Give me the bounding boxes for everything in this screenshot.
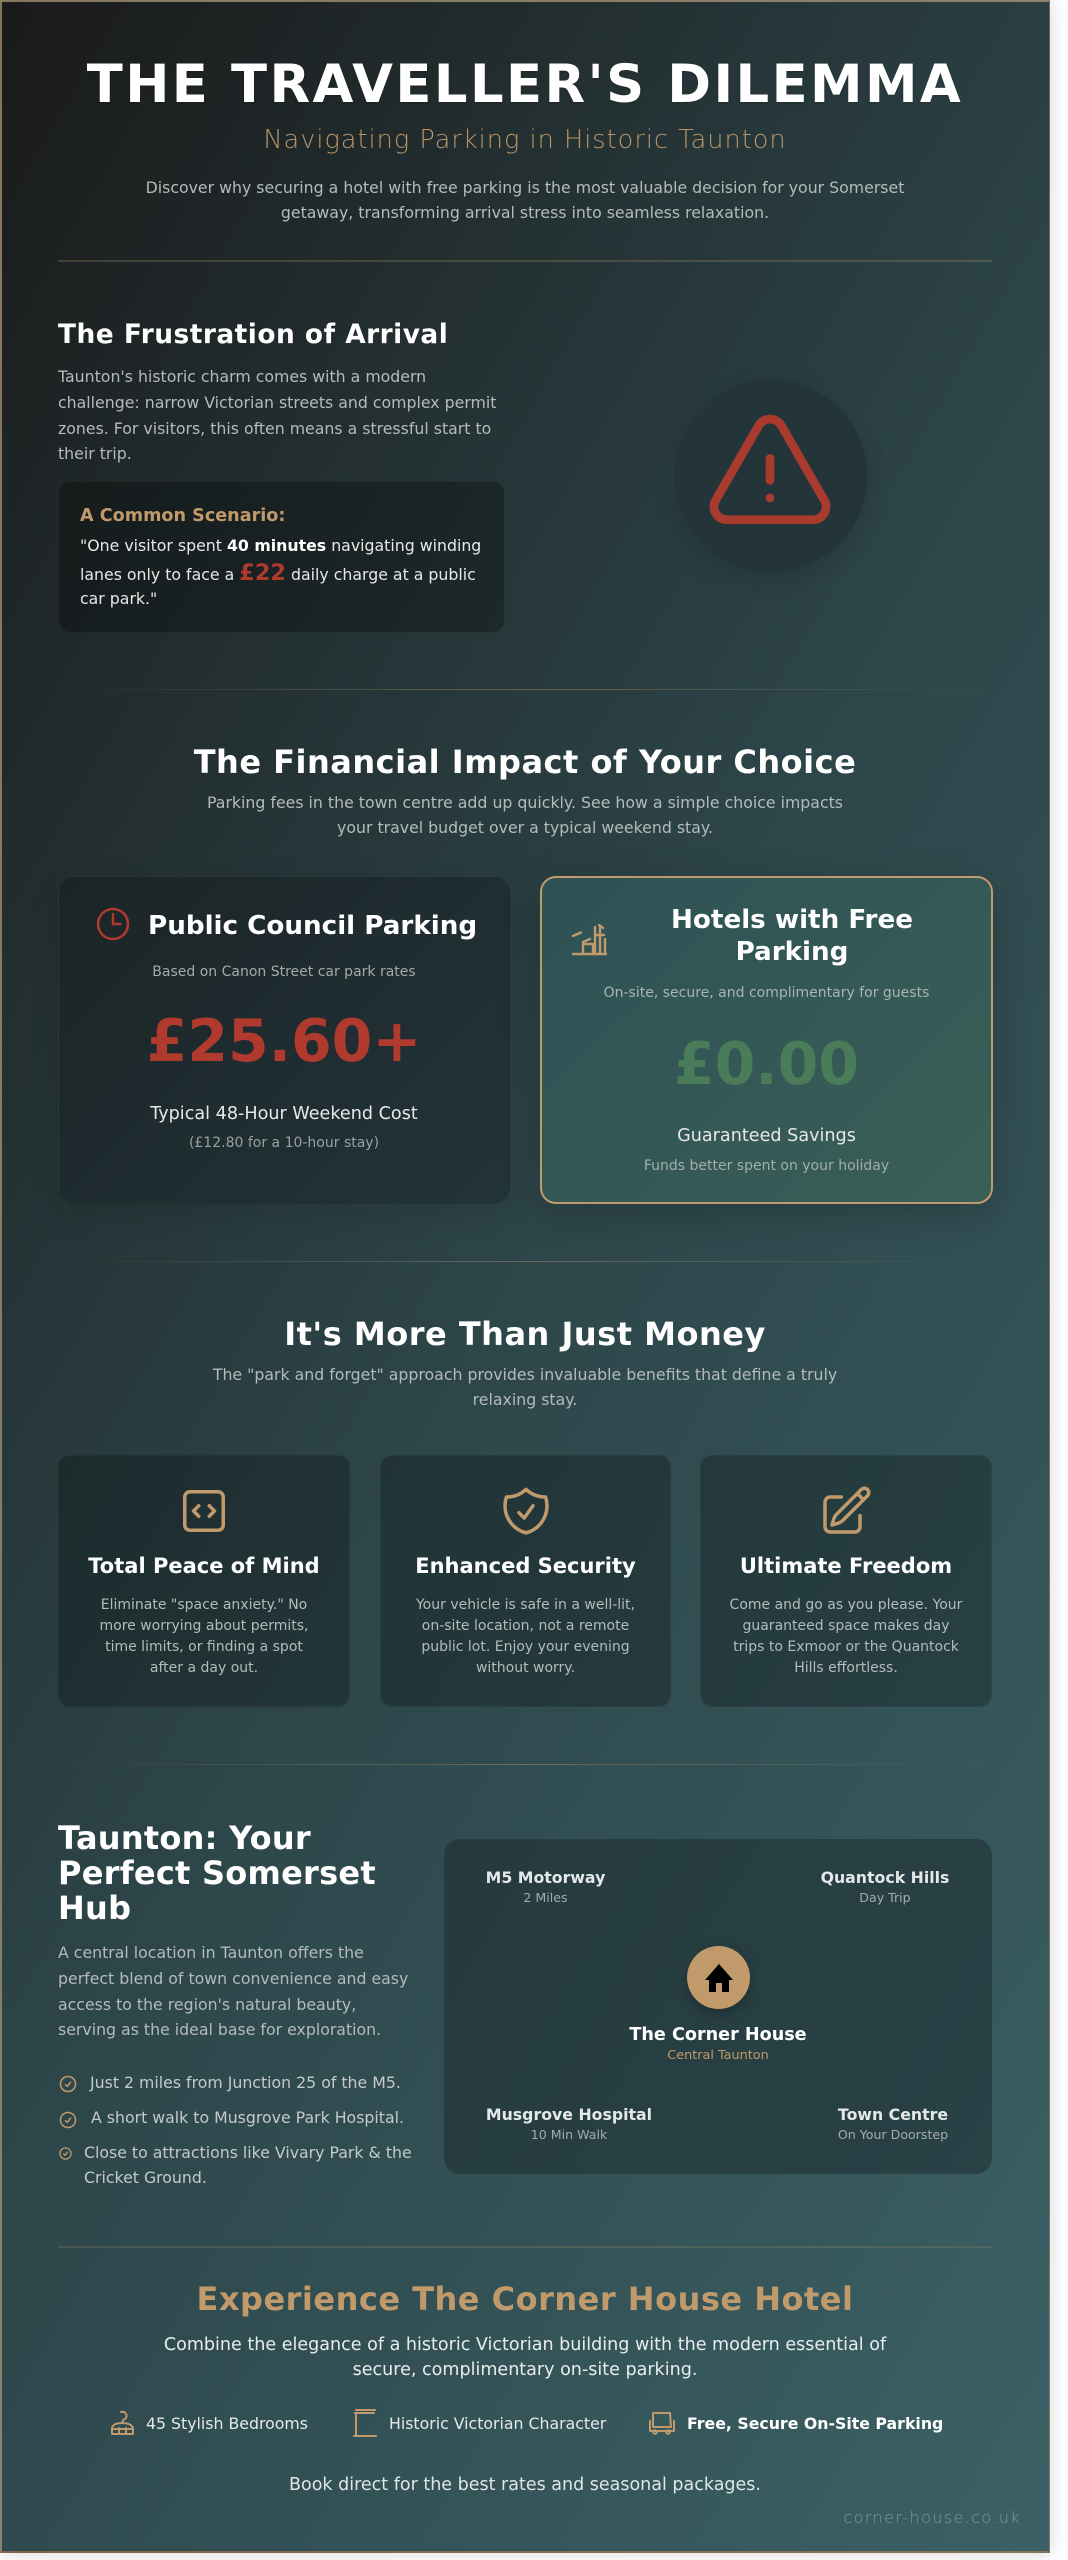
card text: public lot. Enjoy your evening	[421, 1639, 630, 1655]
distance: Day Trip	[859, 1890, 911, 1905]
callout quote: car park."	[80, 589, 157, 608]
intro text: Discover why securing a hotel with free parking is the most valuable decision for your Somerset	[146, 178, 904, 197]
heading: It's More Than Just Money	[284, 1315, 766, 1353]
callout heading: A Common Scenario:	[80, 506, 285, 526]
icon: check	[59, 2147, 72, 2160]
feature: parking	[649, 2410, 945, 2438]
card text: time limits, or finding a spot	[105, 1639, 303, 1655]
card heading: Parking	[736, 937, 848, 967]
icon: home	[687, 1946, 750, 2009]
subtitle: Navigating Parking in Historic Taunton	[263, 125, 787, 155]
feature list	[111, 2409, 943, 2437]
card text	[730, 1597, 962, 1676]
website url: corner-house.co.uk	[843, 2508, 1021, 2527]
icon: clock	[96, 908, 130, 940]
section: frustration of arrival	[58, 319, 867, 632]
card note: Based on Canon Street car park rates	[152, 964, 416, 980]
card text: Come and go as you please. Your	[730, 1597, 962, 1613]
card text	[100, 1597, 308, 1676]
body text: secure, complimentary on-site parking.	[353, 2360, 697, 2380]
price label: Typical 48-Hour Weekend Cost	[150, 1104, 418, 1124]
body text: Combine the elegance of a historic Victorian building with the modern essential of	[164, 2335, 886, 2355]
heading: Perfect Somerset	[58, 1854, 376, 1892]
heading: The Financial Impact of Your Choice	[194, 743, 856, 781]
card heading: Hotels with Free	[671, 905, 913, 935]
card heading	[671, 905, 913, 967]
hub name: The Corner House	[629, 2025, 807, 2045]
card text: trips to Exmoor or the Quantock	[733, 1639, 959, 1655]
destination: musgrove hospital	[486, 2105, 652, 2142]
price: £25.60+	[147, 1007, 421, 1075]
feature: victorian character	[353, 2409, 606, 2437]
card heading: Ultimate Freedom	[740, 1554, 952, 1578]
item text	[84, 2143, 412, 2186]
list: location benefits	[59, 2073, 412, 2186]
section: financial impact	[58, 743, 994, 1214]
distance: 10 Min Walk	[531, 2127, 607, 2142]
icon: check	[60, 2076, 76, 2092]
section intro: Parking fees in the town centre add up quickly. See how a simple choice impacts	[207, 793, 843, 812]
place name: Town Centre	[838, 2105, 948, 2124]
destination: quantock hills	[821, 1868, 949, 1905]
price label: Guaranteed Savings	[677, 1126, 856, 1146]
icon: shield check	[503, 1488, 549, 1535]
body text	[58, 367, 496, 463]
section intro: relaxing stay.	[473, 1390, 577, 1408]
section intro: The "park and forget" approach provides invaluable benefits that define a truly	[213, 1365, 837, 1384]
distance: 2 Miles	[523, 1890, 568, 1905]
price footnote: (£12.80 for a 10-hour stay)	[189, 1135, 379, 1151]
panel: location map	[444, 1839, 992, 2174]
body text: zones. For visitors, this often means a stressful start to	[58, 419, 491, 438]
card text: Hills effortless.	[794, 1660, 898, 1676]
booking note: Book direct for the best rates and seasonal packages.	[289, 2475, 761, 2495]
body text: challenge: narrow Victorian streets and complex permit	[58, 393, 496, 412]
intro text: getaway, transforming arrival stress into seamless relaxation.	[281, 202, 769, 222]
intro text	[146, 178, 904, 222]
place name: M5 Motorway	[486, 1868, 605, 1887]
distance: On Your Doorstep	[838, 2127, 948, 2142]
title: THE TRAVELLER'S DILEMMA	[87, 54, 963, 115]
heading: Experience The Corner House Hotel	[197, 2280, 853, 2318]
feature text: Historic Victorian Character	[389, 2414, 606, 2433]
item text: A short walk to Musgrove Park Hospital.	[91, 2108, 404, 2127]
card text: guaranteed space makes day	[742, 1618, 950, 1634]
heading: Hub	[58, 1889, 131, 1927]
body text	[58, 1943, 408, 2039]
card text: on-site location, not a remote	[422, 1618, 629, 1634]
card heading: Public Council Parking	[148, 911, 477, 941]
panel: total peace of mind	[58, 1455, 350, 1707]
callout quote	[80, 536, 481, 608]
body text: their trip.	[58, 444, 132, 463]
body text	[164, 2335, 886, 2380]
feature text: Free, Secure On-Site Parking	[687, 2414, 943, 2433]
body text: A central location in Taunton offers the	[58, 1943, 364, 1962]
list item	[59, 2143, 412, 2186]
body text: perfect blend of town convenience and easy	[58, 1969, 408, 1988]
section intro: your travel budget over a typical weekend stay.	[337, 818, 713, 836]
price footnote: Funds better spent on your holiday	[644, 1158, 889, 1174]
hub marker: the corner house	[629, 1946, 807, 2063]
item text: Just 2 miles from Junction 25 of the M5.	[90, 2073, 401, 2092]
panel: enhanced security	[380, 1455, 671, 1707]
destination: town centre	[838, 2105, 948, 2142]
section intro	[207, 793, 843, 836]
heading	[58, 1819, 376, 1927]
icon: warning triangle	[672, 378, 868, 574]
hub location: Central Taunton	[667, 2048, 769, 2063]
icon: code bracket square	[183, 1490, 225, 1532]
card text	[416, 1597, 635, 1676]
icon: pencil square	[823, 1486, 870, 1534]
place name: Musgrove Hospital	[486, 2105, 652, 2124]
callout quote: "One visitor spent 40 minutes navigating winding	[80, 536, 481, 555]
card text: more worrying about permits,	[100, 1618, 308, 1634]
list item	[60, 2108, 404, 2128]
card heading: Total Peace of Mind	[88, 1554, 320, 1578]
item text: Cricket Ground.	[84, 2168, 207, 2186]
card note: On-site, secure, and complimentary for guests	[604, 985, 929, 1001]
icon: column	[353, 2409, 377, 2437]
feature: bedrooms	[111, 2410, 308, 2435]
panel: ultimate freedom	[700, 1455, 992, 1707]
panel: public council parking	[58, 876, 510, 1204]
feature text: 45 Stylish Bedrooms	[146, 2414, 308, 2433]
icon: car	[649, 2410, 675, 2436]
destination: m5 motorway	[486, 1868, 606, 1905]
callout quote: lanes only to face a £22 daily charge at a public	[80, 560, 476, 586]
section: benefits	[58, 1315, 992, 1707]
heading: The Frustration of Arrival	[58, 319, 448, 350]
card text: Eliminate "space anxiety." No	[101, 1597, 307, 1613]
card text: without worry.	[476, 1660, 575, 1676]
section: call to action	[111, 2280, 943, 2495]
price: £0.00	[674, 1030, 859, 1098]
body text: access to the region's natural beauty,	[58, 1995, 356, 2014]
card text: Your vehicle is safe in a well-lit,	[416, 1597, 635, 1613]
icon: check	[60, 2112, 76, 2128]
icon: hotel building	[572, 924, 608, 956]
heading: Taunton: Your	[58, 1819, 311, 1857]
body text: Taunton's historic charm comes with a modern	[58, 367, 426, 386]
callout: a common scenario	[58, 481, 505, 633]
card heading: Enhanced Security	[415, 1554, 636, 1578]
item text: Close to attractions like Vivary Park & the	[84, 2143, 412, 2162]
list item	[60, 2073, 401, 2092]
place name: Quantock Hills	[821, 1868, 949, 1887]
icon: bed	[111, 2410, 134, 2435]
card text: after a day out.	[150, 1660, 258, 1676]
panel: hotels with free parking	[540, 876, 993, 1204]
section intro	[212, 1365, 837, 1408]
section: location hub	[58, 1819, 992, 2186]
body text: serving as the ideal base for exploration.	[58, 2020, 381, 2039]
